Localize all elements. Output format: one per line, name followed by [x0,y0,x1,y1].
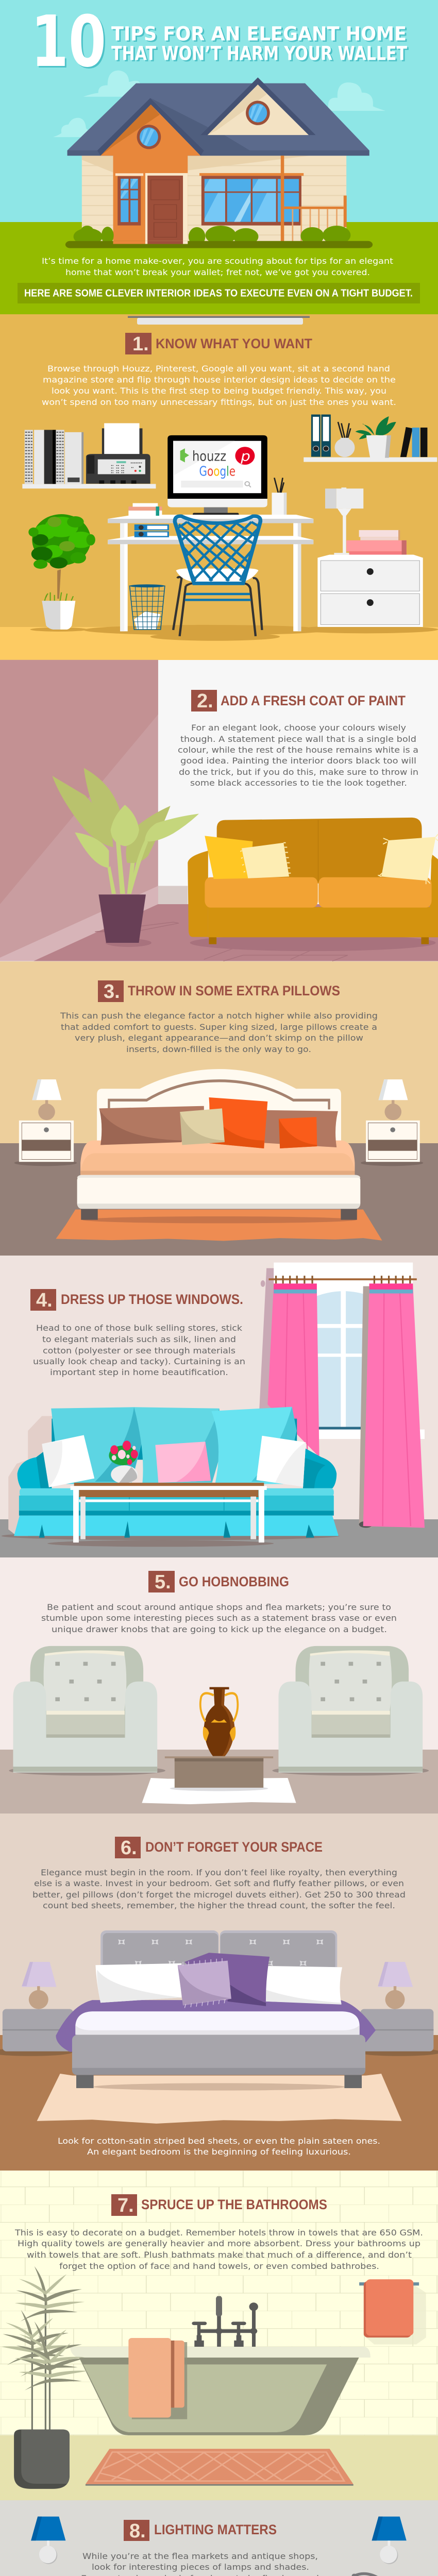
monitor: Google [199,464,235,479]
intro text: home that won’t break your wallet; fret not, we’ve got you covered. [65,267,370,277]
bath mat [86,2449,353,2486]
wall shelf with books and fax [22,423,156,488]
title: TIPS FOR AN ELEGANT HOME [113,24,408,46]
body text: tip 1: magazine store and flip through house interior design ideas to decide on the [43,375,396,384]
left lamp and nightstand [14,1079,77,1166]
closing text: tip 6 [58,2136,380,2157]
wall towel [359,2279,426,2345]
body text: tip 1: won’t spend on too many unnecessary fittings, but on just the ones you want. [42,397,396,407]
pen holder [272,478,287,516]
body text: tip 2: though. A statement piece wall that is a single bold [180,734,416,744]
closing text: tip 6: Look for cotton-satin striped bed sheets, or even the plain sateen ones. [58,2136,380,2146]
heading: tip 7: 7. [117,2195,134,2216]
heading: tip 2: ADD A FRESH COAT OF PAINT [221,693,406,708]
intro text: It’s time for a home make-over, you are scouting about for tips for an elegant [42,256,393,266]
intro text [42,256,393,277]
sofa [2,1407,340,1547]
illustration: lamps and blue sofa [31,2517,427,2576]
panel: tip 1 know what you want [0,314,438,660]
heading: tip 8 [124,2520,277,2542]
floor lamp [329,2573,427,2576]
potted palm [2,2266,89,2489]
heading: tip 1: KNOW WHAT YOU WANT [156,336,312,351]
panel: tip 3 extra pillows [0,961,438,1256]
right armchair [278,1646,423,1772]
heading: tip 3: 3. [104,981,120,1003]
title: TIPS FOR AN ELEGANT HOME [111,23,407,45]
rug [37,2074,402,2124]
panel: intro header [0,0,438,314]
body text: tip 7: forget the option of face and hand towels, or even combed bathrobes. [59,2261,379,2271]
desk [108,503,313,631]
illustration: bedroom [0,1930,438,2124]
panel: tip 4 dress up windows [0,1256,438,1557]
vase with flowers [109,1440,138,1484]
body text: tip 8 [81,2551,319,2576]
body text: tip 8: While you’re at the flea markets and antique shops, [82,2551,318,2561]
body text: tip 2: do the trick, but if you do this, make sure to throw in [179,767,418,777]
body text: tip 4: to elegant materials such as silk, linen and [42,1334,236,1344]
body text: tip 1: Browse through Houzz, Pinterest, Google all you want, sit at a second hand [47,364,390,374]
wall shelf with binders and plant [304,415,437,462]
body text: tip 6: Elegance must begin in the room. If you don’t feel like royalty, then everything [41,1868,397,1877]
body text: tip 3: very plush, elegant appearance—and don’t skimp on the pillow [75,1033,363,1043]
heading: tip 2: 2. [197,690,213,712]
body text: tip 1 [42,364,396,407]
body text: tip 7: High quality towels are generally heavier and more absorbent. Dress your bathrooms up [18,2239,420,2248]
heading: tip 4: DRESS UP THOSE WINDOWS. [61,1292,243,1307]
heading: tip 3 [98,980,340,1003]
body text: tip 4 [33,1323,245,1377]
body text: tip 5: Be patient and scout around antique shops and flea markets; you’re sure to [47,1602,391,1612]
body text: tip 3: inserts, down-filled is the only way to go. [126,1044,311,1054]
illustration: bedroom with pillows [14,1069,423,1241]
left wall lamp [31,2517,65,2564]
closing text: tip 6: An elegant bedroom is the beginning of feeling luxurious. [87,2147,351,2157]
potted tree [28,514,95,630]
body text: tip 7: with towels that are soft. Plush bathmats make that much of a difference, and don’t [27,2250,412,2260]
body text: tip 4: important step in home beautification. [50,1367,228,1377]
banner callout [18,283,420,303]
banner callout: HERE ARE SOME CLEVER INTERIOR IDEAS TO EXECUTE EVEN ON A TIGHT BUDGET. [24,287,413,299]
panel: tip 8 lighting matters [0,2500,438,2576]
heading: tip 8: 8. [129,2520,146,2542]
body text: tip 6: else is a waste. Invest in your bedroom. Get soft and fluffy feather pillows, or even [34,1878,404,1888]
body text: tip 5: stumble upon some interesting pieces such as a statement brass vase or even [41,1613,397,1623]
body text: tip 7: This is easy to decorate on a budget. Remember hotels throw in towels that are 650 GSM. [14,2228,423,2238]
monitor: houzz [192,448,226,464]
bathtub [70,2347,370,2435]
right lamp and nightstand [361,1079,423,1166]
heading: tip 4: 4. [36,1290,53,1311]
title [31,1,409,84]
coffee table [71,1483,267,1543]
body text: tip 7 [14,2228,423,2271]
monitor: p [240,448,250,464]
heading: tip 5 [148,1571,289,1593]
left nightstand and lamp [0,1962,73,2056]
towel on tub [128,2338,187,2419]
illustration: living room with curtains [2,1263,425,1547]
body text: tip 3: This can push the elegance factor a notch higher while also providing [60,1011,378,1021]
body text: tip 2: some black accessories to tie the look together. [190,778,407,788]
heading: tip 8: LIGHTING MATTERS [154,2522,277,2537]
right nightstand and lamp [358,1962,438,2056]
waste bin [130,584,165,630]
body text: tip 5: unique drawer knobs that are going to kick up the elegance on a budget. [52,1624,387,1634]
heading: tip 6 [115,1837,323,1859]
body text: tip 1: look you want. This is the first step to being budget friendly. This way, you [52,386,386,396]
floor details: shadows, rug and side table [9,1756,429,1804]
body text: tip 2: good idea. Painting the interior doors black too will [180,756,416,766]
brass vase [200,1687,238,1756]
body text: tip 6: count bed sheets, remember, the higher the thread count, the softer the feel. [43,1901,395,1910]
heading: tip 1 [125,333,312,355]
panel: tip 5 go hobnobbing [0,1557,438,1814]
rug [56,1210,382,1241]
body text: tip 4: usually look cheap and tacky). Curtaining is an [33,1357,245,1366]
dresser with lamp and books [317,487,423,627]
body text: tip 5 [41,1602,397,1634]
body text: tip 2 [178,723,418,788]
heading: tip 5: GO HOBNOBBING [179,1574,289,1589]
panel: tip 6 don't forget your space [0,1814,438,2171]
body text: tip 6: better, gel pillows (don’t forget the microgel duvets either). Get 250 to 300 thread [32,1890,406,1900]
illustration: painted wall with sofa and plant [0,660,438,961]
panel: tip 2 fresh coat of paint [0,660,438,961]
heading: tip 2 [191,690,406,712]
curtains [267,1276,425,1528]
body text: tip 2: colour, while the rest of the house remains white is a [178,745,418,755]
left armchair [13,1646,157,1772]
heading: tip 5: 5. [155,1571,171,1593]
heading: tip 1: 1. [132,333,149,355]
plant [52,768,199,943]
heading: tip 7: SPRUCE UP THE BATHROOMS [141,2197,327,2212]
heading: tip 3: THROW IN SOME EXTRA PILLOWS [128,983,340,998]
heading: tip 6: 6. [121,1837,137,1859]
illustration: house [53,71,385,248]
body text: tip 4: Head to one of those bulk selling stores, stick [36,1323,243,1333]
heading: tip 6: DON’T FORGET YOUR SPACE [145,1839,323,1855]
heading: tip 7 [111,2194,327,2216]
throw pillows [42,1435,306,1487]
body text: tip 6 [32,1868,406,1910]
chair [173,516,262,636]
bed [56,1930,376,2088]
sofa [188,818,438,944]
body text: tip 3: that added comfort to guests. Super king sized, large pillows create a [61,1022,377,1032]
illustration: bathroom [2,2266,426,2489]
illustration: armchairs and brass vase [13,1646,423,1772]
panel: tip 7 spruce up the bathrooms [0,2171,438,2500]
monitor [167,435,267,516]
body text: tip 2: For an elegant look, choose your colours wisely [191,723,406,733]
title: 10 [32,3,108,84]
body text: tip 8: look for interesting pieces of lamps and shades. [92,2562,309,2572]
body text: tip 3 [60,1011,378,1054]
heading: tip 4 [30,1289,243,1311]
top shelf edge [128,316,310,325]
bed [77,1069,360,1220]
window [259,1263,425,1439]
body text: tip 4: cotton (polyester or see through materials [43,1346,235,1355]
title: 10 [31,1,106,83]
right wall lamp [372,2517,407,2564]
illustration: home office [22,415,438,641]
faucet [192,2296,258,2347]
